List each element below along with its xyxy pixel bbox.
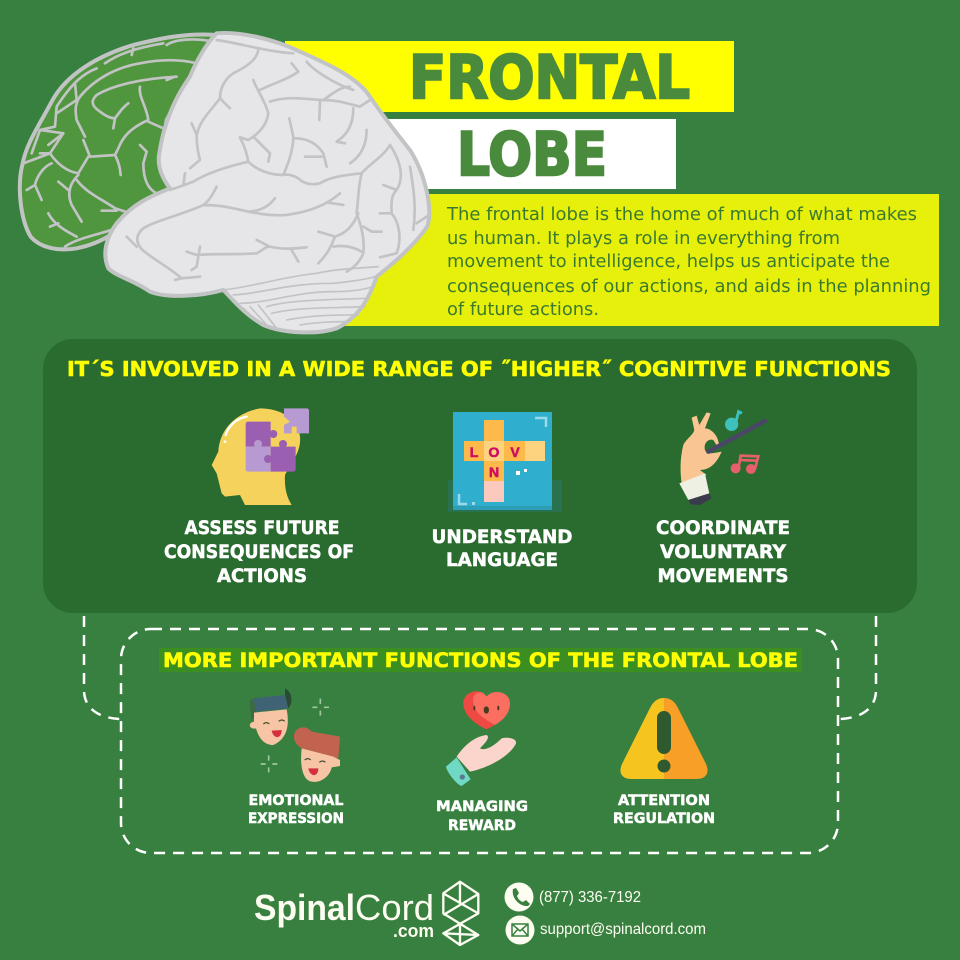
footer logo: SpinalCord.com: Cord xyxy=(355,887,434,928)
icon: heart over hand xyxy=(446,691,516,786)
heading: higher cognitive functions: IT´S INVOLVED IN A WIDE RANGE OF ˝HIGHER˝ COGNITIVE FUNCTIONS xyxy=(67,357,891,381)
label: attention regulation xyxy=(613,793,715,827)
label: attention regulation: ATTENTION xyxy=(618,793,710,809)
frontal lobe folds xyxy=(23,39,213,247)
icon: crossword LOVE: O xyxy=(489,444,500,460)
title banner: LOBE: LOBE xyxy=(457,120,607,190)
label: managing reward: MANAGING xyxy=(436,799,528,815)
label: understand language: UNDERSTAND xyxy=(432,527,572,548)
footer logo: SpinalCord.com: Spinal xyxy=(254,887,355,928)
footer logo: SpinalCord.com: .com xyxy=(393,921,434,941)
intro text block: us human. It plays a role in everything from xyxy=(447,229,840,249)
footer contact: email xyxy=(506,916,706,944)
label: coordinate voluntary movements xyxy=(656,518,790,587)
intro text block xyxy=(335,194,939,326)
label: coordinate voluntary movements: COORDINATE xyxy=(656,518,790,539)
icon: brain with highlighted frontal lobe xyxy=(20,33,429,332)
panel: more important functions xyxy=(121,629,838,853)
title banner: LOBE xyxy=(385,119,676,190)
footer contact: email: support@spinalcord.com xyxy=(540,921,706,938)
label: assess future consequences xyxy=(164,518,354,587)
label: attention regulation: REGULATION xyxy=(613,811,715,827)
icon: crossword LOVE: V xyxy=(510,444,520,460)
label: understand language xyxy=(432,527,572,571)
label: managing reward: REWARD xyxy=(448,818,516,834)
intro text block: The frontal lobe is the home of much of what makes xyxy=(446,205,917,225)
intro text block: of future actions. xyxy=(447,300,599,320)
label: assess future consequences: ASSESS FUTURE xyxy=(184,518,340,539)
panel: higher cognitive functions xyxy=(43,339,917,613)
label: assess future consequences: ACTIONS xyxy=(217,566,307,587)
label: emotional expression xyxy=(248,793,344,827)
icon: conductor hand with baton xyxy=(679,412,765,505)
intro text block: movement to intelligence, helps us anticipate the xyxy=(447,252,890,272)
brain folds xyxy=(127,40,427,280)
footer contact: phone: (877) 336-7192 xyxy=(539,889,641,906)
frontal lobe (green) xyxy=(20,34,217,249)
icon: logo mark xyxy=(443,882,478,945)
label: emotional expression: EXPRESSION xyxy=(248,811,344,827)
icon: head with puzzle xyxy=(212,408,309,505)
footer logo: SpinalCord.com xyxy=(254,882,478,945)
rest of brain (grey) xyxy=(105,33,429,332)
icon: emotional faces xyxy=(249,688,340,782)
icon: crossword LOVE xyxy=(448,412,562,512)
cerebellum folds xyxy=(223,267,378,328)
icon: crossword LOVE: N xyxy=(489,464,499,480)
icon: warning triangle xyxy=(620,698,708,779)
heading: more important functions: MORE IMPORTANT FUNCTIONS OF THE FRONTAL LOBE xyxy=(163,649,798,672)
label: managing reward xyxy=(436,799,528,834)
icon: crossword LOVE: L xyxy=(470,444,479,460)
title banner: FRONTAL: FRONTAL xyxy=(409,43,690,113)
dashed connectors xyxy=(84,616,876,719)
label: coordinate voluntary movements: MOVEMENTS xyxy=(658,566,788,587)
footer contact: phone xyxy=(504,882,641,912)
intro text block: consequences of our actions, and aids in the planning xyxy=(447,277,931,297)
title banner: FRONTAL xyxy=(285,41,734,113)
label: coordinate voluntary movements: VOLUNTARY xyxy=(660,542,787,563)
label: understand language: LANGUAGE xyxy=(446,550,558,571)
label: emotional expression: EMOTIONAL xyxy=(248,793,344,809)
label: assess future consequences: CONSEQUENCES OF xyxy=(164,542,354,563)
